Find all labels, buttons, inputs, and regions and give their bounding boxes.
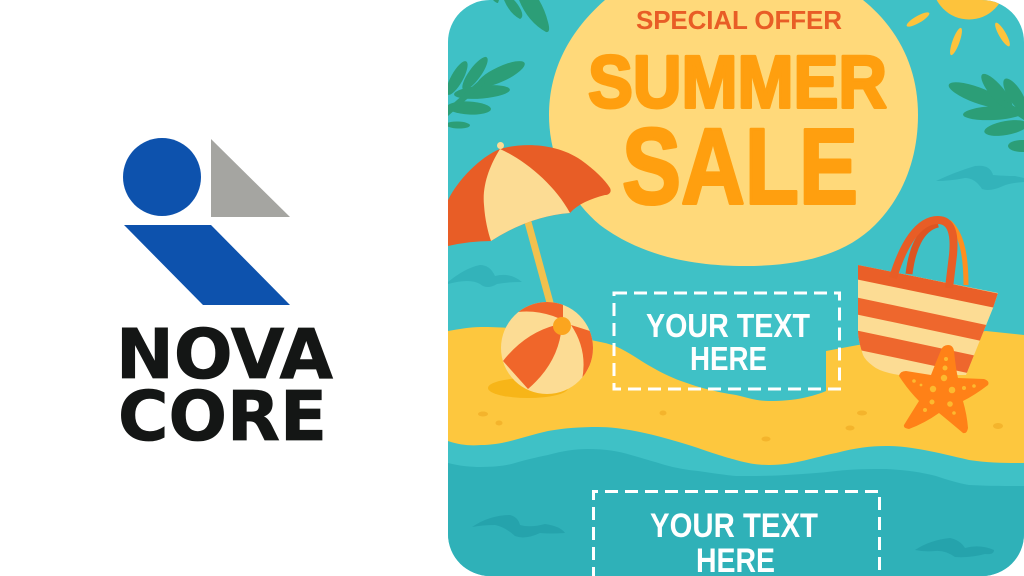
- umbrella: [448, 142, 611, 246]
- wave shadows upper: [448, 166, 1024, 287]
- logo mark triangle: [211, 139, 290, 217]
- umbrella cream panel: [484, 149, 570, 241]
- placeholder text line one: YOUR TEXT: [646, 307, 810, 344]
- back handle: [949, 222, 966, 285]
- starfish: [899, 345, 988, 433]
- deep water: [448, 449, 1024, 576]
- sun with rays: [905, 0, 1012, 56]
- placeholder text line one: YOUR TEXT: [650, 507, 818, 545]
- beach sand: [448, 327, 1024, 465]
- sky and sea background: [448, 0, 1024, 576]
- bag body: [858, 265, 998, 375]
- heading: sale: SALE: [622, 106, 858, 226]
- speech blob behind title: [549, 0, 918, 266]
- text placeholder box upper: [614, 293, 840, 389]
- heading: summer: SUMMER: [588, 40, 887, 124]
- logo wordmark CORE: CORE: [118, 377, 327, 457]
- logo mark parallelogram: [124, 225, 290, 305]
- palm leaves left: [448, 56, 525, 128]
- umbrella pole: [528, 222, 552, 310]
- palm leaves right: [946, 70, 1024, 152]
- umbrella tip: [497, 142, 504, 149]
- logo mark circle: [123, 138, 201, 216]
- front handle: [893, 220, 954, 288]
- wave shadows lower: [472, 515, 994, 557]
- palm leaves top left: [493, 0, 549, 32]
- logo wordmark NOVA: NOVA: [116, 315, 333, 395]
- beach ball: [501, 300, 598, 394]
- beach ball shadow: [488, 378, 568, 398]
- heading: special offer: SPECIAL OFFER: [636, 5, 842, 35]
- logo: Nova Core: [116, 138, 333, 457]
- beach ball valve: [553, 317, 571, 335]
- beach bag: [858, 216, 998, 375]
- panel: summer sale poster: [443, 0, 1024, 576]
- sand specks: [478, 410, 1003, 442]
- placeholder text line two: HERE: [690, 340, 767, 377]
- text placeholder box lower: [594, 492, 880, 576]
